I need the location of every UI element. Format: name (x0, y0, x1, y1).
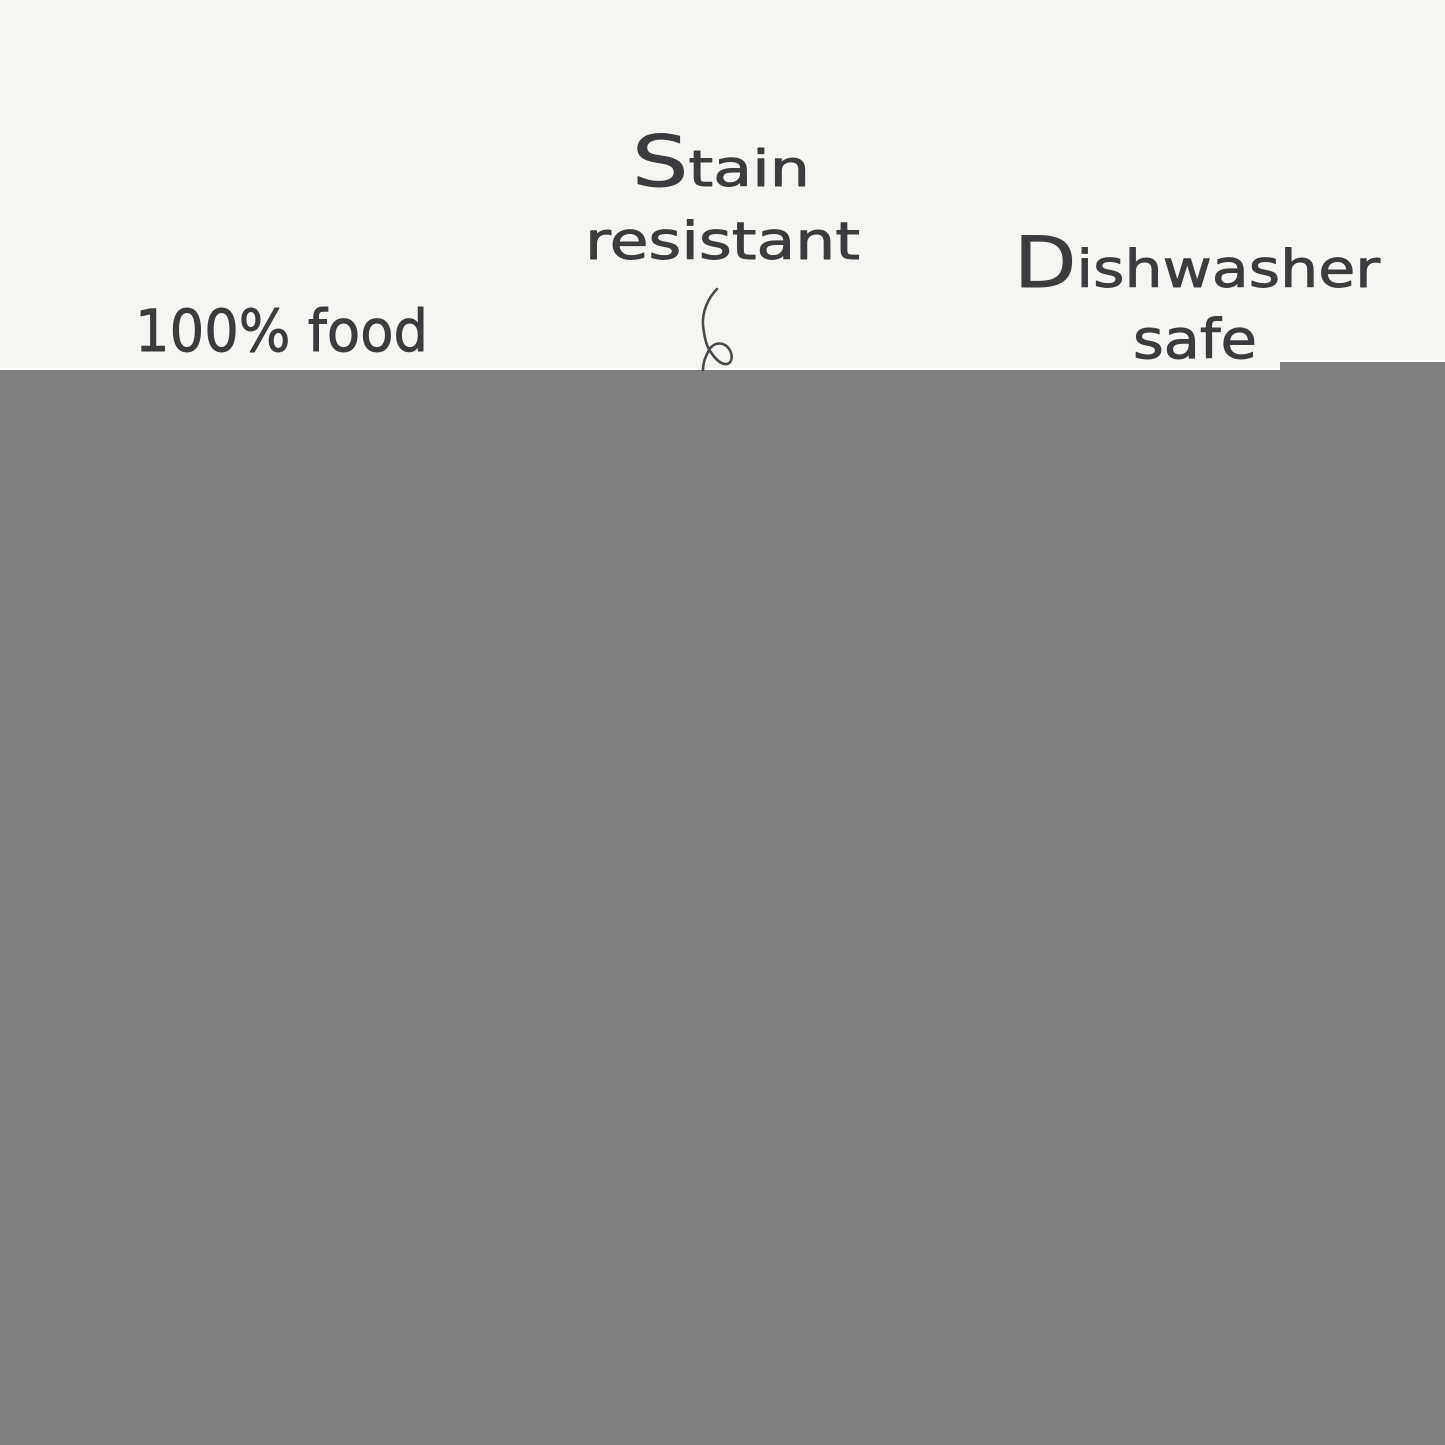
grey masked panel (0, 360, 1445, 1445)
label: Dishwasher safe: Dishwasher (1014, 222, 1381, 304)
label: 100% food: 100% food (135, 297, 428, 365)
label: Dishwasher safe (1014, 222, 1381, 371)
curly leader line (703, 289, 732, 370)
label: Stain resistant: resistant (585, 212, 860, 272)
label: Stain resistant: Stain (632, 121, 810, 203)
label: Dishwasher safe: safe (1133, 308, 1257, 371)
label: Stain resistant (585, 121, 860, 272)
